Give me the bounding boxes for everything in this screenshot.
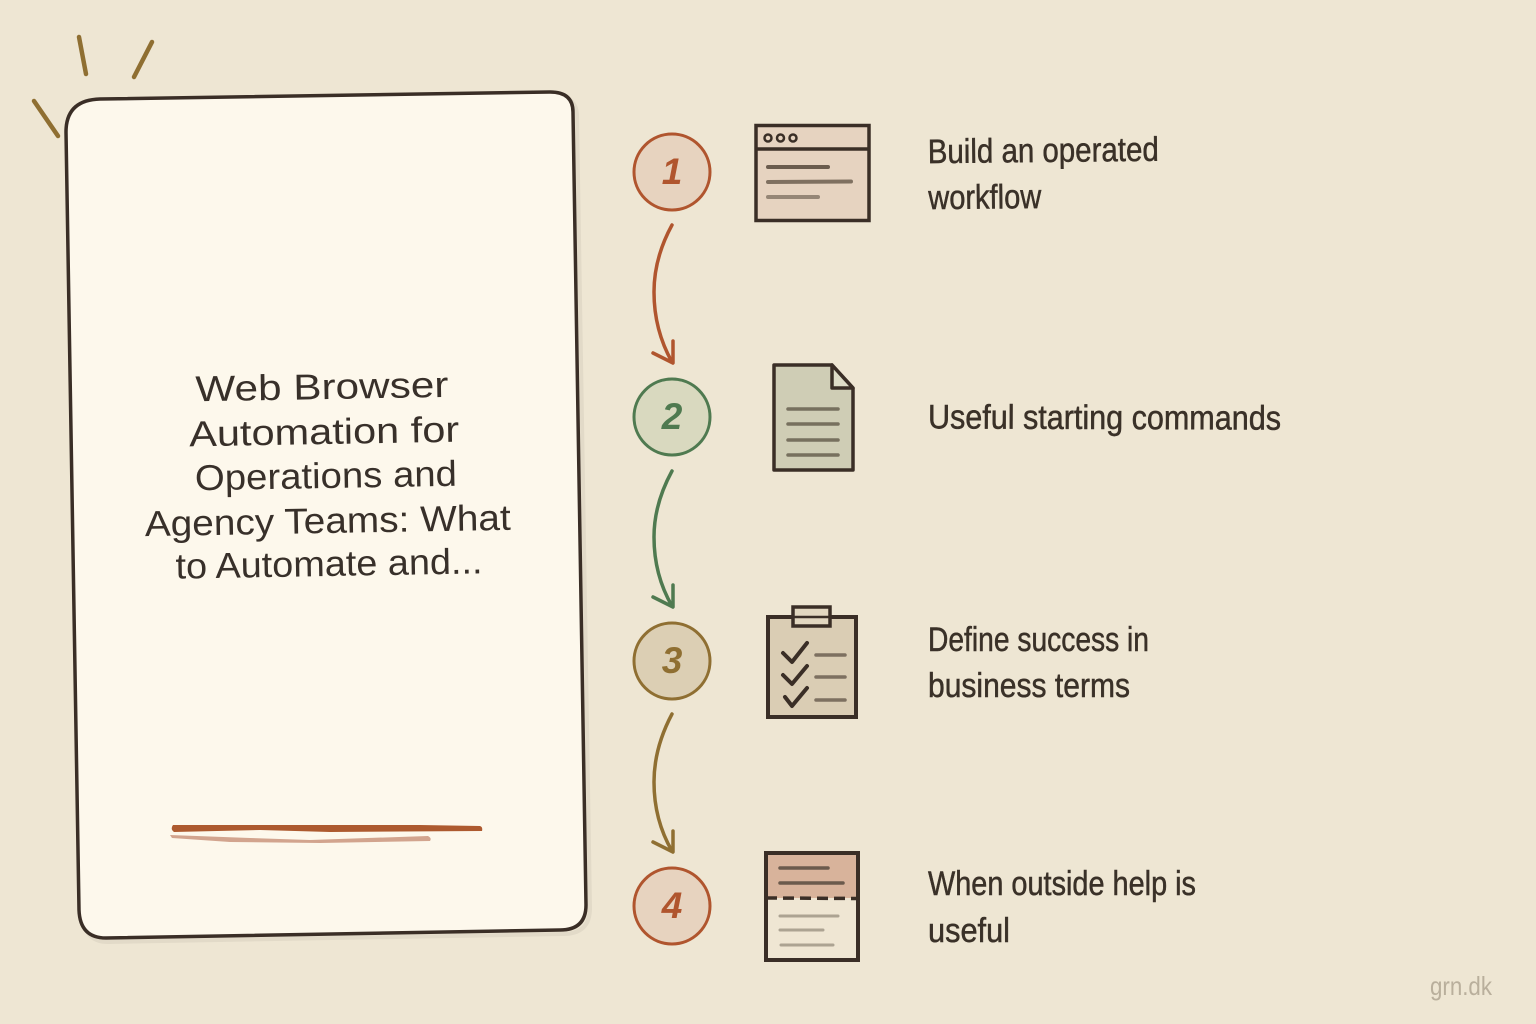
step 3 label	[928, 621, 1149, 705]
arrow: step 1 to 2	[653, 225, 673, 363]
icon: document	[774, 365, 853, 470]
step 4 label: useful	[928, 912, 1010, 950]
icon: browser window	[756, 126, 869, 220]
panel: title card	[66, 92, 590, 942]
step 2 number	[634, 379, 710, 455]
step 1 label: workflow	[927, 178, 1042, 217]
step 3 label: Define success in	[928, 621, 1149, 659]
step 1 number	[634, 134, 710, 210]
arrow: step 3 to 4	[653, 714, 673, 852]
step 2 number: 2	[661, 396, 683, 437]
underline accent	[170, 825, 482, 843]
icon: checklist clipboard	[768, 607, 856, 717]
card title: Web Browser	[195, 364, 449, 409]
step 1 number: 1	[662, 151, 682, 192]
arrow: step 2 to 3	[653, 471, 673, 607]
step 3 number: 3	[662, 640, 683, 681]
step 4 number: 4	[661, 885, 682, 926]
card title: Operations and	[195, 453, 457, 498]
icon: split document	[766, 853, 858, 960]
step 4 label	[928, 865, 1196, 950]
step 2 label: Useful starting commands	[928, 398, 1281, 438]
icon: emphasis ticks	[34, 37, 152, 136]
step 4 label: When outside help is	[928, 865, 1196, 903]
step 3 number	[634, 623, 710, 699]
step 4 number	[634, 868, 710, 944]
step 1 label	[927, 131, 1159, 217]
watermark: grn.dk	[1430, 971, 1493, 1001]
card title: Automation for	[189, 409, 460, 454]
card title: to Automate and...	[175, 540, 483, 587]
step 1 label: Build an operated	[928, 131, 1159, 171]
card title: Agency Teams: What	[144, 497, 511, 544]
step 3 label: business terms	[928, 667, 1130, 705]
card title	[142, 363, 512, 587]
